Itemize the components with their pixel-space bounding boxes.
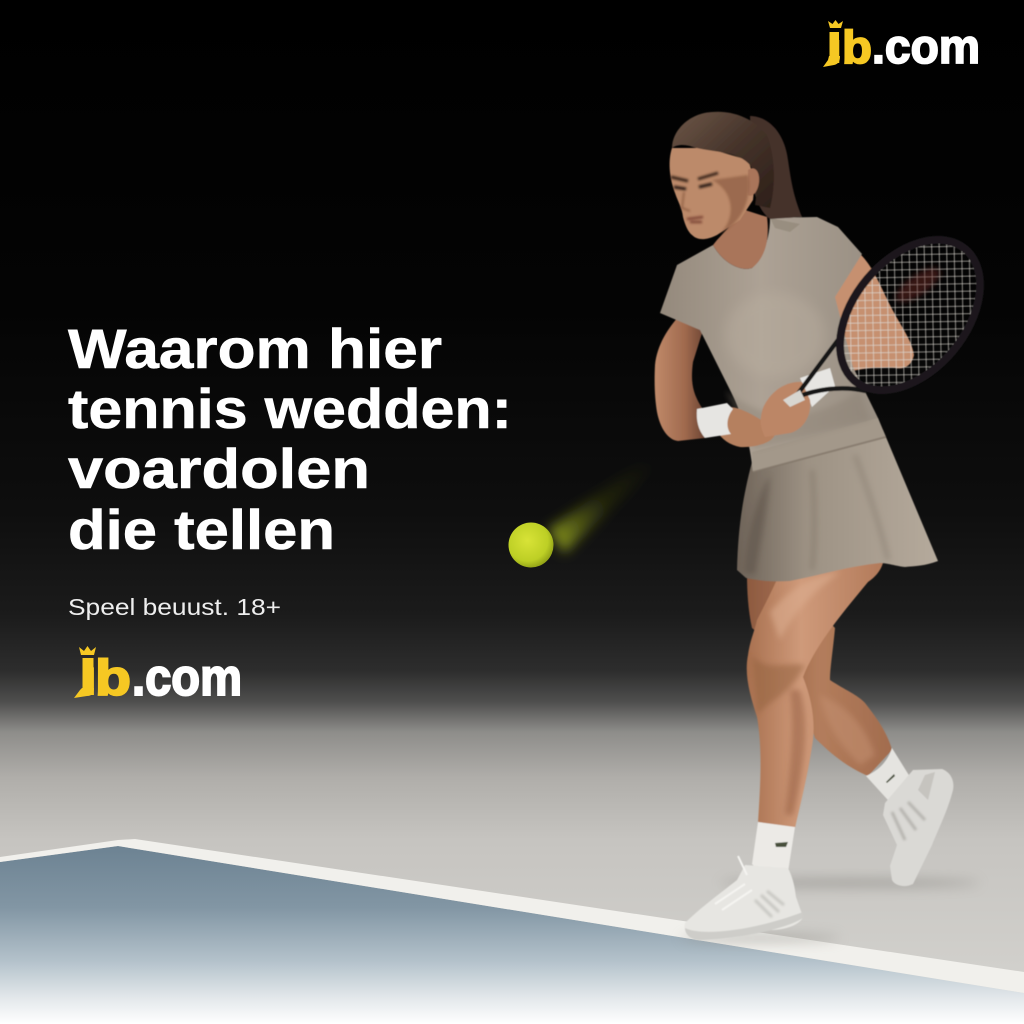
front shoe	[685, 856, 803, 940]
racket	[782, 236, 984, 408]
right wristband	[800, 368, 835, 407]
front leg	[747, 550, 883, 828]
sock logo	[775, 842, 788, 847]
ponytail	[750, 116, 802, 219]
ear	[748, 168, 759, 196]
leg shading	[752, 572, 875, 815]
logo: left jb.com	[74, 646, 240, 698]
logo: top-right jb.com	[823, 20, 978, 67]
back sock logo	[886, 774, 895, 783]
back leg	[747, 575, 892, 776]
logo: top-right jb.com: .com	[872, 21, 980, 74]
left arm	[655, 315, 705, 441]
responsible play note: Speel beuust. 18+	[68, 594, 281, 620]
logo: left jb.com: .com	[132, 649, 242, 707]
neck	[713, 210, 768, 269]
back sock	[866, 748, 920, 810]
headline: Waarom hier	[68, 317, 442, 380]
headline: tennis wedden:	[68, 377, 512, 440]
tennis ball with motion trail	[508, 456, 656, 568]
left hand with wristband	[697, 403, 775, 447]
face features	[671, 173, 749, 234]
logo: top-right jb.com: b	[842, 21, 872, 73]
logo: top-right jb.com: j	[826, 21, 842, 73]
right arm	[815, 254, 914, 378]
tennis player	[655, 112, 1008, 940]
logo: left jb.com: j	[79, 650, 97, 706]
head	[670, 148, 755, 239]
hair	[672, 112, 774, 208]
right hand	[761, 382, 810, 437]
front sock	[752, 822, 795, 885]
back shoe	[883, 769, 953, 886]
headline: die tellen	[68, 498, 335, 561]
headline	[68, 317, 512, 561]
player floor shadows	[680, 879, 980, 942]
t-shirt	[660, 217, 886, 472]
headline: voardolen	[68, 437, 370, 500]
tennis court surface	[0, 839, 1024, 1024]
logo: left jb.com: b	[95, 650, 131, 706]
skirt	[737, 430, 938, 581]
